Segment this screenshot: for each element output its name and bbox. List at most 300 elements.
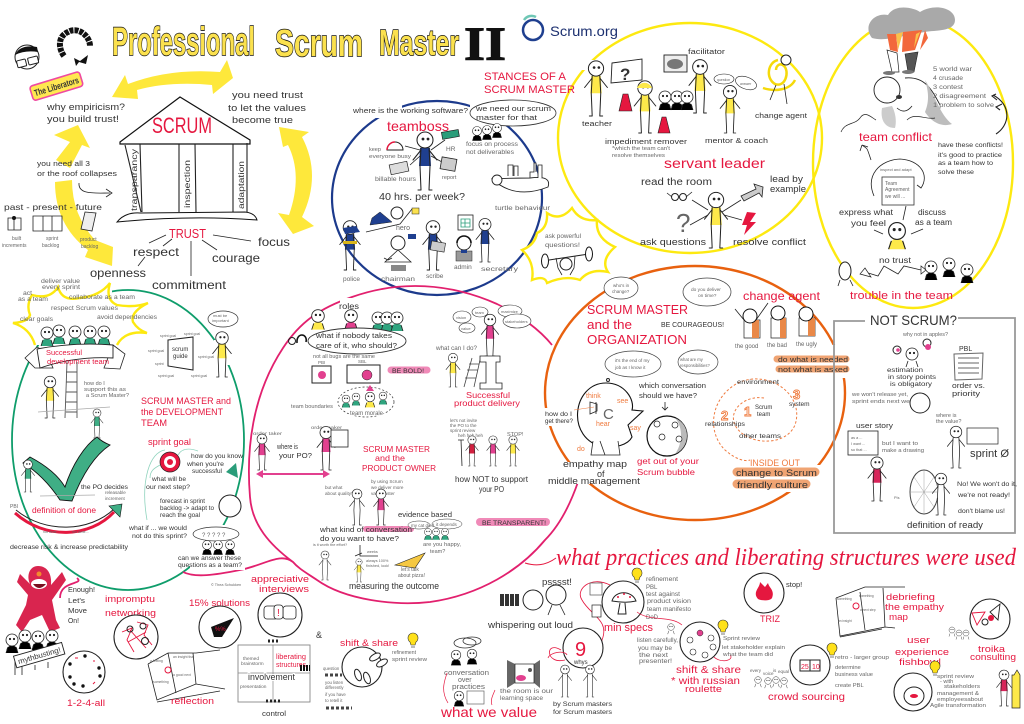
panel: not scrum: user story	[856, 423, 894, 430]
systems spiral: 1	[744, 404, 751, 419]
circle: 15% solutions: %%	[215, 627, 226, 633]
conversation and outcome: evidence based	[398, 510, 452, 519]
text: conflict levels: 5 world war	[933, 66, 973, 73]
text: empiricism and trust notes: why empiricism?	[46, 102, 125, 113]
ladder and supporting figure: support this as	[84, 387, 126, 393]
panel: team boss: we need our scrum	[475, 104, 551, 113]
circle: crowd sourcing: 10	[812, 664, 820, 671]
empathy map: think	[586, 393, 601, 400]
shift and share with russian roulette: let stakeholder explain	[722, 645, 785, 651]
book: debriefing the empathy map: something	[859, 594, 874, 598]
icon: The Liberators tag	[29, 71, 83, 101]
text: empiricism and trust notes: or the roof collapses	[37, 169, 117, 178]
past present future	[2, 202, 102, 250]
stick figures: team boss roles: hero	[396, 225, 410, 232]
9 whys: 9	[575, 639, 586, 661]
circle: appreciative interviews: © Thea Schukken	[211, 583, 241, 587]
heading: scrum master and the development team: the DEVELOPMENT	[141, 407, 223, 417]
conversation and outcome: but what	[325, 485, 343, 490]
text: empiricism and trust notes: you need trust	[232, 90, 303, 101]
stick figures: stances	[582, 49, 808, 248]
circle: user experience fishbowl: employeesabout	[937, 697, 984, 703]
change agent	[735, 289, 848, 374]
trust values: focus	[258, 235, 290, 249]
icon: scrum guide book: sprint	[155, 362, 164, 366]
chart: liberating structures matrix: presentation	[240, 684, 267, 690]
sprint goal cluster: reach the goal	[160, 512, 201, 519]
panel: not scrum: sprint ends next week	[852, 399, 917, 405]
conversation and outcome: team?	[430, 549, 445, 555]
conversation and outcome: by using Scrum	[371, 479, 403, 484]
chart: liberating structures matrix: liberating	[276, 654, 306, 661]
team agreement: express what	[839, 208, 894, 217]
book: reflection: an insight that	[173, 655, 194, 659]
stick figures: team boss roles: admin	[454, 264, 472, 271]
stick figures: stances: servant leader	[664, 155, 765, 171]
text: conflict levels: 2 disagreement	[933, 93, 986, 100]
title: Master	[379, 22, 459, 63]
temple diagram: adaptation	[236, 161, 246, 209]
panel: team boss: report	[442, 175, 457, 181]
callout: ask powerful questions: questions!	[545, 242, 580, 249]
panel outline: trouble in the team ellipse	[813, 18, 1013, 308]
book: reflection: reflection	[171, 696, 214, 706]
title: Professional	[112, 20, 255, 64]
icon: scrum guide book: sprint goal	[191, 374, 207, 378]
panel: scrum master and the product owner: care of it, who should?	[316, 341, 397, 350]
logo: Scrum.org	[523, 16, 618, 40]
panel: scrum master and the product owner: SCRUM MASTER	[363, 444, 430, 454]
book: debriefing the empathy map: a next step	[860, 608, 876, 612]
text: empiricism and trust notes: you need all 3	[37, 159, 90, 168]
min specs: DoD	[646, 615, 659, 621]
panel: not scrum: priority	[952, 389, 980, 398]
no trust row: trouble in the team	[850, 290, 953, 302]
successful product delivery: sprint review	[450, 428, 476, 433]
panel: team boss: HR	[446, 146, 456, 153]
text: development team values: collaborate as a team	[69, 294, 135, 301]
temple diagram	[117, 97, 257, 222]
circle: user experience fishbowl	[894, 635, 986, 711]
volcano illustration	[841, 7, 955, 132]
successful product delivery: STOP!	[507, 432, 524, 438]
empathy map: what are my	[680, 357, 704, 362]
panel: scrum master and the organization: ORGANIZATION	[587, 332, 687, 347]
successful product delivery: what can I do?	[435, 346, 478, 352]
stick figures: stances: facilitator	[688, 49, 726, 56]
panel: scrum master and the product owner: SBL	[358, 359, 367, 364]
panel: scrum master and the product owner: BE BOLD!	[392, 368, 424, 375]
title	[112, 18, 506, 71]
team agreement: you feel	[851, 219, 886, 228]
what we value: learning space	[500, 695, 543, 702]
what we value: practices	[452, 684, 486, 691]
sprint goal cluster: backlog -> adapt to	[160, 505, 214, 512]
conversation and outcome: finished, look!	[366, 564, 389, 568]
systems spiral: team	[757, 412, 770, 418]
arrow: right double arrow	[278, 127, 314, 234]
chart: liberating structures matrix: involvement	[248, 672, 295, 682]
shift and share with russian roulette: presenter!	[639, 659, 672, 665]
text: empiricism and trust notes: become true	[232, 115, 293, 126]
empathy map: job as I know it	[614, 365, 646, 370]
team agreement: we will ...	[885, 194, 905, 200]
past present future: backlog	[81, 244, 98, 250]
past present future: past - present - future	[4, 202, 102, 212]
heading: scrum master and the development team: SCRUM MASTER and	[141, 396, 231, 406]
icon: scrum guide book: sprint goal	[198, 355, 214, 359]
check mark: definition of done: releasable	[105, 490, 126, 495]
panel: not scrum: PBL	[959, 346, 972, 353]
icon: turtle: turtle behaviour	[495, 205, 551, 212]
icon: scrum guide book: guide	[173, 354, 188, 360]
stick figures: stances: change agent	[755, 111, 808, 120]
circle: appreciative interviews: interviews	[259, 584, 310, 594]
stick figures: team boss roles: police	[343, 276, 360, 283]
stick figures: stances: impediment remover	[605, 139, 688, 146]
check mark: definition of done	[10, 409, 129, 551]
icon: scrum guide book: sprint goal	[158, 374, 174, 378]
stick figures: team boss roles: secretary	[481, 266, 519, 273]
sprint goal cluster: successful	[192, 468, 223, 475]
no trust row	[838, 256, 973, 302]
panel: not scrum: No! We won't do it,	[957, 481, 1017, 488]
banner: successful development team: Successful	[46, 350, 82, 357]
change agent: the ugly	[796, 342, 817, 348]
shift and share with russian roulette: what the team did	[722, 652, 773, 658]
circle: crowd sourcing: crowd sourcing	[768, 692, 845, 703]
trust values: openness	[90, 266, 146, 280]
illustration: Elmo and mythbusting	[6, 566, 95, 675]
stick figures: team boss roles	[340, 207, 519, 283]
text: development team values: act	[23, 290, 32, 297]
shift and share: refinement	[392, 650, 416, 656]
text: development team values	[18, 278, 158, 323]
circle: user experience fishbowl: Agile transformation	[930, 703, 986, 709]
what we value	[440, 637, 613, 720]
circle: crowd sourcing: every	[750, 668, 762, 673]
ladder and supporting figure: a Scrum Master?	[86, 393, 129, 399]
chart: liberating structures matrix: themed	[243, 656, 259, 662]
panel: scrum master and the product owner: not all bugs are the same	[313, 354, 375, 360]
scrum bubble	[637, 383, 706, 477]
shift and share: if you have	[325, 692, 346, 697]
text: conflict levels: team conflict	[859, 130, 933, 144]
sprint goal cluster: forecast in sprint	[160, 498, 205, 505]
systems spiral: environment	[737, 379, 779, 386]
text: development team values: deliver value	[41, 278, 80, 285]
conversation and outcome: about pizza!	[398, 573, 425, 579]
conversation and outcome	[313, 479, 546, 591]
sprint goal cluster: ? ? ? ? ?	[202, 533, 226, 539]
conversation and outcome: it depends	[436, 522, 458, 527]
circle: user experience fishbowl: stakeholders	[944, 684, 980, 690]
sprint goal cluster: our next step?	[146, 484, 190, 491]
successful product delivery: vision	[456, 315, 466, 320]
no trust row: no trust	[879, 256, 912, 265]
empathy map: how do I	[545, 411, 572, 418]
empathy map: get there?	[545, 418, 573, 425]
heading: scrum master and the development team: TEAM	[141, 418, 167, 428]
panel: not scrum: definition of ready	[907, 520, 984, 530]
team agreement: Agreement	[885, 187, 910, 193]
systems spiral: other teams	[739, 433, 782, 440]
circle: appreciative interviews	[211, 574, 310, 637]
what we value: over	[458, 677, 472, 684]
panel outline: stances circle	[558, 23, 822, 253]
systems spiral: 3	[793, 387, 800, 402]
shift and share with russian roulette	[637, 612, 785, 694]
panel: stances heading: SCRUM MASTER	[484, 84, 575, 96]
what we value: for Scrum masters	[553, 709, 613, 716]
icon: scrum guide book: scrum	[172, 347, 188, 353]
panel: scrum master and the product owner: your PO?	[279, 451, 312, 460]
empathy map: it's the end of my	[615, 358, 650, 363]
panel: scrum master and the organization	[587, 277, 731, 347]
panel: scrum master and the product owner: team boundaries	[291, 404, 333, 410]
systems spiral: INSIDE OUT	[750, 458, 800, 468]
whispering out loud: psssst!	[542, 577, 572, 587]
panel: scrum master and the organization: SCRUM MASTER	[587, 302, 688, 317]
min specs: test against	[646, 592, 680, 598]
panel outline: team boss circle	[332, 101, 542, 295]
scrum bubble: should we have?	[639, 393, 697, 400]
stick figures: team boss roles: scribe	[426, 273, 444, 280]
panel: not scrum: the value?	[936, 419, 961, 425]
empathy map	[545, 350, 718, 486]
arrow: left down arrow	[55, 180, 113, 266]
panel: not scrum: in story points	[888, 374, 937, 381]
book: debriefing the empathy map: something	[837, 597, 852, 601]
text: conflict levels: solve these	[938, 169, 975, 176]
shift and share: shift & share	[340, 638, 398, 648]
circle: crowd sourcing: business value	[835, 672, 873, 678]
panel: scrum master and the product owner: PRODUCT OWNER	[362, 463, 436, 473]
illustrator signature figure and pencil	[997, 670, 1020, 708]
illustration: Elmo and mythbusting: Enough!	[68, 587, 95, 594]
panel: not scrum: NOT SCRUM?	[870, 312, 957, 328]
what we value: what we value	[440, 704, 537, 720]
text: empiricism and trust notes	[37, 90, 306, 178]
text: conflict levels: 3 contest	[933, 84, 963, 91]
circle: 15% solutions: 15% solutions	[189, 598, 251, 608]
arrow: left up arrow	[54, 125, 90, 168]
empathy map: do	[577, 446, 585, 453]
team agreement	[839, 145, 952, 249]
team agreement: as a team	[915, 218, 952, 227]
empathy map: middle management	[548, 476, 641, 486]
text: development team values: respect Scrum values	[51, 305, 119, 312]
stick figures: stances: example	[770, 184, 806, 194]
panel: scrum master and the organization: who's in	[613, 283, 630, 288]
sprint goal cluster: when you're	[186, 461, 224, 468]
panel: scrum master and the organization: do you deliver	[691, 287, 721, 293]
panel outline: product owner loop	[60, 286, 578, 603]
what we value: the room is our	[500, 688, 554, 695]
illustration: Elmo and mythbusting: mythbusting!	[17, 645, 62, 666]
shift and share: you listen	[325, 680, 344, 685]
systems spiral: system	[789, 401, 810, 408]
systems spiral	[705, 379, 817, 491]
panel: not scrum: estimation	[887, 367, 923, 374]
systems spiral: Scrum	[755, 405, 772, 411]
panel: not scrum: order vs.	[952, 381, 985, 390]
panel: scrum master and the product owner: order maker	[311, 425, 342, 431]
panel: team boss: master for that	[476, 113, 538, 122]
past present future: product	[80, 237, 97, 243]
illustration: Elmo and mythbusting: On!	[68, 618, 79, 625]
banner: successful development team	[25, 325, 125, 369]
whispering out loud	[487, 577, 573, 630]
min specs: refinement	[646, 577, 678, 583]
circle: impromptu networking	[105, 594, 158, 659]
panel: not scrum: so that ...	[851, 448, 867, 452]
circle: user experience fishbowl: experience	[895, 647, 949, 657]
chart: liberating structures matrix: control	[262, 711, 287, 718]
systems spiral: change to Scrum	[736, 468, 817, 479]
text: empiricism and trust notes: you build trust!	[47, 114, 119, 125]
panel: not scrum: we're not ready!	[957, 492, 1010, 499]
book: debriefing the empathy map: the empathy	[885, 602, 945, 612]
circle: crowd sourcing: voice	[763, 671, 774, 676]
burst: development team values	[13, 283, 148, 345]
text: conflict levels: it's good to practice	[938, 152, 1003, 159]
team agreement: inspect and adapt	[880, 167, 912, 172]
min specs: product vision	[647, 599, 691, 605]
icon: scrum guide book: sprint goal	[160, 334, 176, 338]
book: debriefing the empathy map: map	[889, 612, 908, 622]
stick figures: stances: lead by	[770, 174, 804, 184]
chart: liberating structures matrix: brainstorm	[241, 661, 264, 667]
text: conflict levels	[859, 66, 1007, 176]
shift and share with russian roulette: * with russian	[671, 676, 740, 687]
circle: 15% solutions	[189, 598, 251, 648]
knockouts for outline gaps	[8, 60, 850, 570]
check mark: definition of done: PBI	[10, 504, 18, 510]
logo: Scrum.org: Scrum.org	[550, 23, 618, 39]
panel: not scrum: we won't release yet,	[852, 392, 908, 398]
stick figures: stances: question	[717, 78, 730, 82]
stick figures: stances: resolve conflict	[733, 237, 806, 248]
change agent: change agent	[743, 289, 821, 303]
conversation and outcome: what kind of conversation	[319, 525, 412, 534]
circle: crowd sourcing: is	[773, 668, 777, 673]
icon: scrum guide book: sprint goal	[184, 332, 200, 336]
ladder and supporting figure: how do I	[84, 381, 105, 387]
banner: successful development team: development team	[47, 359, 109, 366]
empathy map: see	[617, 398, 628, 405]
circle: impromptu networking: impromptu	[105, 594, 155, 604]
circle: TRIZ	[744, 573, 802, 624]
heading: scrum master and the development team	[141, 396, 231, 428]
shift and share: differently	[325, 685, 344, 690]
sprint goal cluster: not do this sprint?	[132, 533, 187, 540]
book: debriefing the empathy map: an insight	[838, 619, 852, 623]
check mark: definition of done: not done...	[43, 530, 60, 534]
past present future: backlog	[42, 243, 59, 249]
book: reflection	[148, 650, 225, 706]
change agent: not what is asked	[778, 365, 848, 374]
successful product delivery: team	[475, 310, 485, 315]
conversation and outcome: about quality?	[325, 491, 354, 496]
successful product delivery: stakeholders	[505, 319, 528, 324]
whispering out loud: whispering out loud	[487, 620, 573, 630]
stick figures: stances: resolve themselves	[612, 153, 666, 159]
change agent: the bad	[767, 343, 787, 349]
empathy map: hear	[596, 421, 611, 428]
stick figures: stances: teacher	[582, 121, 613, 128]
shift and share: &	[316, 630, 322, 640]
systems spiral: relationships	[705, 421, 746, 428]
conversation and outcome: value faster	[371, 491, 395, 496]
panel outline: development team ellipse	[12, 290, 244, 590]
panel: scrum master and the product owner	[253, 302, 436, 478]
figure: scrum master with thought cloud: must be	[213, 313, 228, 318]
systems spiral: friendly culture	[737, 480, 808, 491]
text: empiricism and trust notes: to let the values	[228, 103, 306, 114]
temple diagram: transparancy	[129, 148, 139, 211]
empathy map: C	[603, 406, 614, 423]
circle: crowd sourcing: retro - larger group	[835, 655, 889, 661]
sprint goal cluster: can we answer these	[178, 555, 241, 562]
conversation and outcome: we deliver more	[371, 485, 404, 490]
icon: The Liberators tag: The Liberators	[33, 75, 80, 98]
shift and share: sprint review	[392, 657, 427, 663]
stick figures: stances: ?	[676, 208, 690, 238]
past present future: sprint	[46, 236, 59, 242]
chart: liberating structures matrix: structures	[276, 662, 306, 669]
trust values	[90, 226, 290, 292]
book: debriefing the empathy map: debriefing	[886, 592, 935, 602]
panel: not scrum: as a ...	[851, 436, 862, 440]
icon: scrum guide book: sprint goal	[148, 349, 164, 353]
text: conflict levels: as a team how to	[938, 160, 994, 167]
empathy map: empathy map	[563, 459, 627, 469]
text: conflict levels: 1 problem to solve	[933, 102, 994, 109]
panel: team boss	[352, 100, 556, 203]
sprint goal cluster: how do you know	[191, 453, 243, 460]
circle: 1-2-4-all	[63, 651, 105, 708]
text: conflict levels: have these conflicts!	[938, 142, 1003, 149]
panel: scrum master and the product owner: PBI	[318, 360, 325, 365]
circle: user experience fishbowl: management &	[937, 691, 979, 697]
conversation and outcome: measuring the outcome	[349, 581, 439, 591]
conversation and outcome: do you want to have?	[320, 534, 399, 543]
stick figures: stances: read the room	[641, 177, 712, 188]
book: debriefing the empathy map	[836, 587, 945, 637]
circle: crowd sourcing: 25	[801, 664, 809, 671]
panel: scrum master and the organization: change?	[612, 289, 630, 294]
what we value: by Scrum masters	[553, 701, 613, 708]
check mark: definition of done: the PO decides	[81, 484, 129, 491]
shift and share with russian roulette: you may be	[638, 646, 673, 652]
conversation and outcome: are you happy,	[423, 542, 461, 548]
conversation and outcome: always 100%	[366, 559, 389, 563]
scrum bubble: Scrum bubble	[637, 468, 696, 477]
temple diagram: SCRUM	[152, 113, 212, 138]
past present future: built	[12, 236, 22, 242]
sprint goal cluster: sprint goal	[148, 437, 191, 447]
successful product delivery: Successful	[466, 390, 510, 400]
panel: not scrum: don't blame us!	[958, 508, 1005, 515]
panel: not scrum: I want ...	[851, 442, 865, 446]
circle: crowd sourcing	[750, 643, 889, 703]
arrow: to temple	[79, 183, 112, 197]
figure: scrum master with thought cloud	[208, 311, 238, 377]
panel: not scrum: where is	[935, 413, 957, 419]
check mark: definition of done: decrease risk & increase predictability	[10, 544, 129, 551]
successful product delivery: how NOT to support	[455, 475, 529, 484]
